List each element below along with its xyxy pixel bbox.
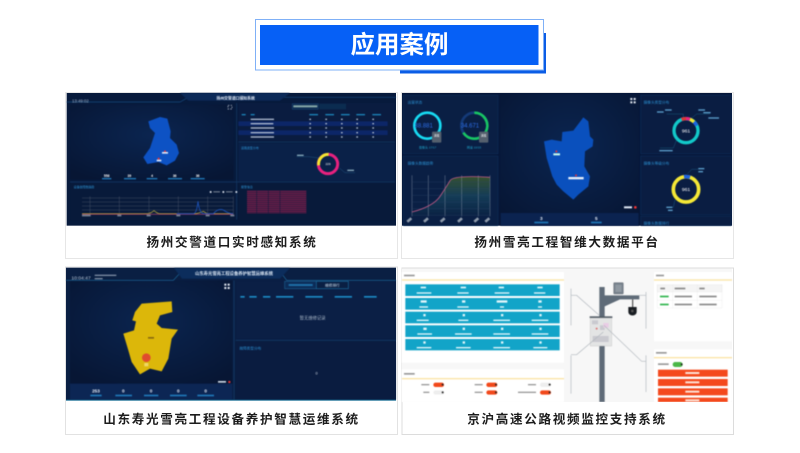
stats row: 558 [104,174,110,178]
panel: Shandong Shouguang maintenance system: 0 [316,370,319,375]
map [123,301,178,374]
caption [402,402,733,434]
control section [402,369,564,402]
map [544,117,593,200]
status section [402,272,564,363]
camera table [654,272,732,341]
gauges: 运营状态 [408,100,423,105]
caption: 扬州雪亮工程智维大数据平台 [474,234,660,250]
table [292,104,318,109]
panel: Shandong Shouguang maintenance system: 暂无维修记录 [300,314,326,321]
panel: Yangzhou snow-bright big data platform [402,92,734,258]
title text: 应用案例 [350,30,448,59]
panel: Yangzhou snow-bright big data platform: 满载 [434,134,440,138]
panel: Yangzhou traffic police system [66,92,398,258]
panel: Yangzhou traffic police system: 4 [151,174,153,178]
panel: Shandong Shouguang maintenance system [66,267,398,434]
panel: Yangzhou traffic police system: 36 [173,174,177,178]
panel: Yangzhou snow-bright big data platform: 满载 [481,134,487,138]
panel: Shandong Shouguang maintenance system: 故障类型分布 [239,345,262,350]
panel: Shandong Shouguang maintenance system: 10:04:47 [71,275,91,281]
panel: Yangzhou snow-bright big data platform: 34.671 [461,124,480,130]
panel: Yangzhou snow-bright big data platform: 5 [595,216,598,221]
panel: Yangzhou snow-bright big data platform: 38.881 [415,124,433,130]
panel: Shandong Shouguang maintenance system: 0 [122,389,125,394]
caption: 山东寿光雪亮工程设备养护智慧运维系统 [103,412,360,426]
panel: Yangzhou traffic police system: 39 [127,174,131,178]
panel: Shandong Shouguang maintenance system: 0 [177,389,180,394]
stats: 3 [540,216,543,221]
caption: 扬州交警道口实时感知系统 [147,234,317,250]
quick action section [654,349,732,402]
panel: Shandong Shouguang maintenance system: 0 [150,389,153,394]
panel: Shandong Shouguang maintenance system: 0 [204,389,207,394]
panel: Shandong Shouguang maintenance system: 维修排行 [325,282,340,287]
donut: type: 摄像头类型分布 [644,100,670,105]
title banner [256,20,546,74]
panel: Yangzhou snow-bright big data platform: 961 [682,187,690,193]
caption: 京沪高速公路视频监控支持系统 [467,412,667,426]
expand icon [228,105,232,109]
panel: Yangzhou traffic police system: 扬州交警道口感知系统 [217,96,255,101]
donut: level: 摄像头等级分布 [644,160,670,165]
line chart: 设备故障数趋势 [74,184,95,189]
panel: Yangzhou traffic police system: 229 [326,162,331,166]
panel: Yangzhou snow-bright big data platform: 摄像头数据排行 [644,221,670,226]
alarm table: 报警信息 [241,184,253,189]
panel: Yangzhou snow-bright big data platform: 网速 10/15 [467,145,481,150]
panel: Yangzhou snow-bright big data platform: 961 [682,128,690,134]
panel: Yangzhou snow-bright big data platform: 摄像头 17/17 [419,145,437,150]
trend chart: 摄像头数据趋势 [408,160,434,165]
map [143,117,179,165]
expand icon [630,98,636,103]
stats: 253 [92,389,100,394]
expand icon [224,284,230,289]
tabs [285,281,316,289]
panel: Yangzhou traffic police system: 36 [196,174,200,178]
panel: Yangzhou traffic police system: 13:49:02 [72,99,89,104]
panel: Beijing-Shanghai highway monitoring system [402,268,734,434]
pole illustration [571,283,646,402]
donut chart: 道路类型分布 [241,145,259,150]
panel: Shandong Shouguang maintenance system: 山东寿光雪亮工程设备养护智慧运维系统 [195,270,274,277]
